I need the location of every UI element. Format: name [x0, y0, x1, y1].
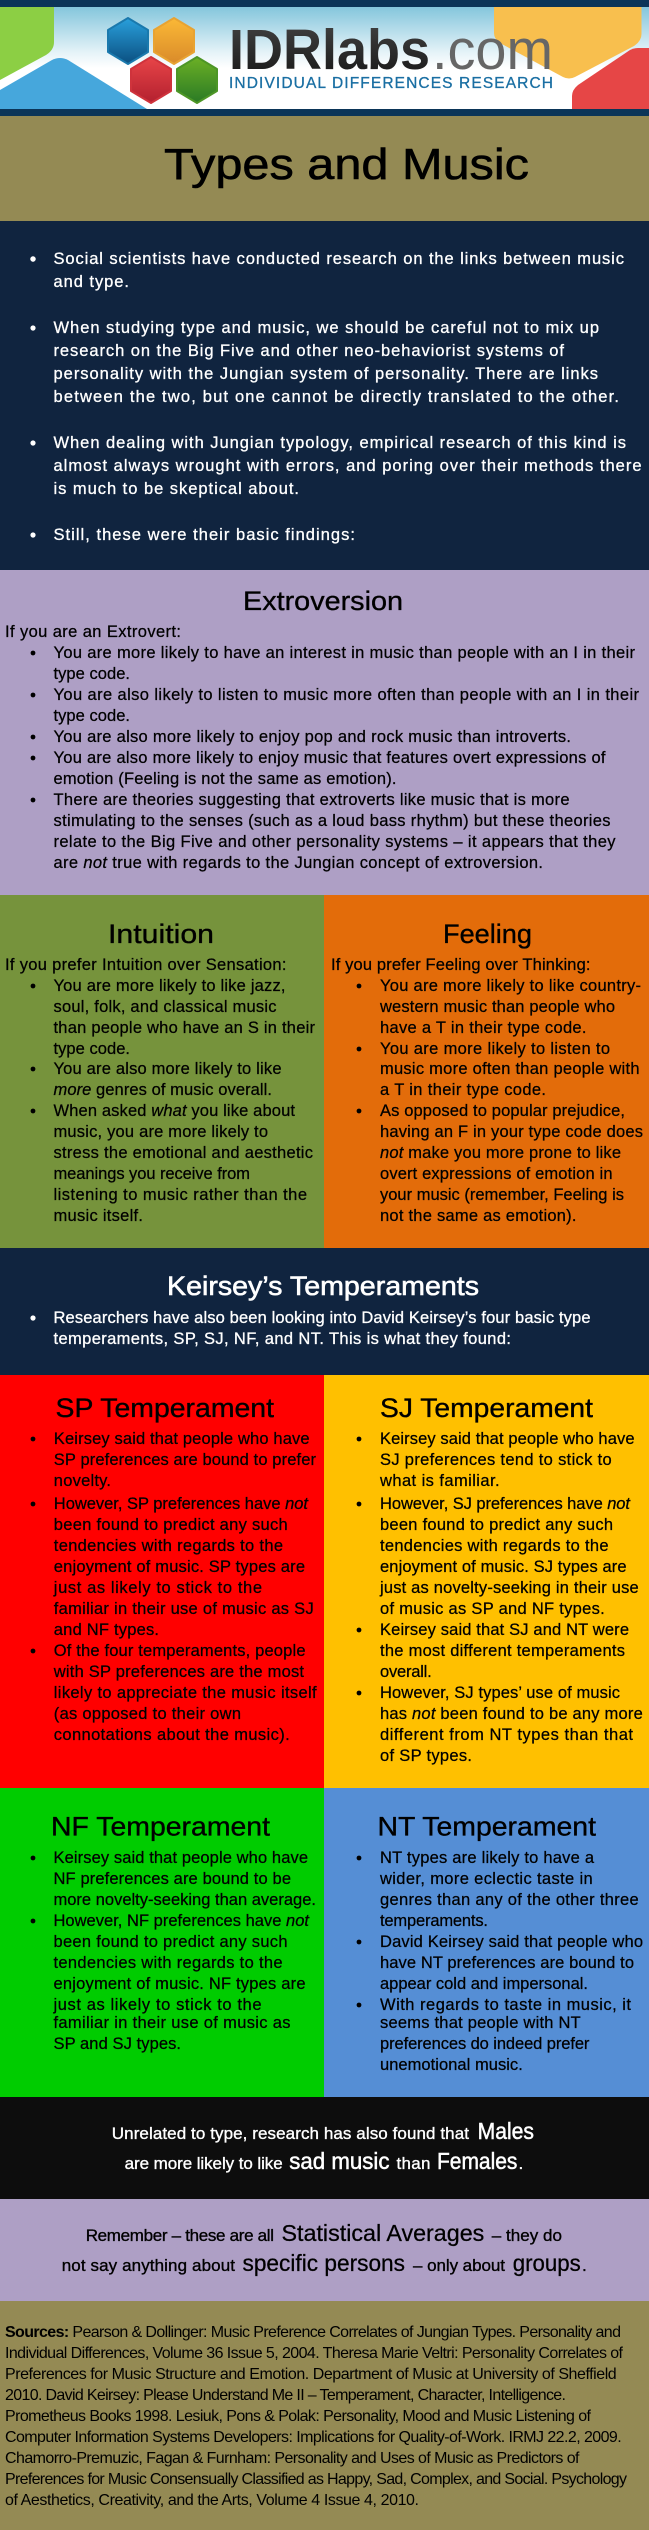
intuition list: stress the emotional and aesthetic [54, 1144, 313, 1162]
SP list: been found to predict any such [54, 1516, 288, 1534]
banner shape: red [572, 48, 649, 109]
sources text: Prometheus Books 1998. Lesiuk, Pons & Polak: Personality, Mood and Music Listening of [5, 2408, 592, 2425]
SJ list: different from NT types than that [380, 1726, 633, 1744]
heading: feeling: Feeling [443, 919, 532, 949]
bullet: empirical research: is much to be skeptical about. [54, 480, 299, 498]
NT list: NT types are likely to have a [380, 1849, 595, 1867]
hexagon: red [131, 57, 171, 103]
bullet: social scientists [30, 250, 624, 291]
NT list: appear cold and impersonal. [380, 1975, 588, 1993]
intuition list: When asked what you like about [54, 1102, 295, 1120]
extroversion list: type code. [54, 707, 130, 725]
intuition list: than people who have an S in their [54, 1019, 316, 1037]
intuition list: You are also more likely to like [54, 1060, 282, 1078]
bullet: type and music [30, 319, 619, 406]
bullet: empirical research [30, 434, 641, 498]
keirsey intro bullet [30, 1309, 590, 1348]
hexagon: blue [108, 18, 148, 64]
feeling list [357, 977, 643, 1225]
SP list: novelty. [54, 1472, 111, 1490]
intuition list: more genres of music overall. [54, 1081, 272, 1099]
NT list: genres than any of the other three [380, 1891, 639, 1909]
extroversion list: emotion (Feeling is not the same as emotion). [54, 770, 396, 788]
NT list: seems that people with NT [380, 2014, 581, 2032]
NF list: SP and SJ types. [54, 2035, 181, 2053]
NF list: NF preferences are bound to be [54, 1870, 291, 1888]
feeling list: having an F in your type code does [380, 1123, 643, 1141]
SJ list: what is familiar. [379, 1472, 500, 1490]
hexagon: green [177, 57, 217, 103]
reminder line 2: not say anything about [62, 2256, 235, 2275]
SJ list: has not been found to be any more [380, 1705, 643, 1723]
heading: keirsey's temperaments: Keirsey’s Temperaments [167, 1271, 479, 1301]
SJ list: However, SJ preferences have not [380, 1495, 631, 1513]
SP list: connotations about the music). [54, 1726, 290, 1744]
panel: NF temperament [0, 1788, 324, 2097]
feeling list: not the same as emotion). [380, 1207, 576, 1225]
SP list: with SP preferences are the most [53, 1663, 304, 1681]
keirsey intro bullet: temperaments, SP, SJ, NF, and NT. This is what they found: [54, 1330, 511, 1348]
intuition list: You are more likely to like jazz, [54, 977, 286, 995]
NT list: temperaments. [380, 1912, 488, 1930]
lead-in: If you are an Extrovert: [5, 623, 181, 641]
logo tagline: INDIVIDUAL DIFFERENCES RESEARCH [229, 75, 553, 92]
feeling list: music more often than people with [380, 1060, 640, 1078]
extroversion list: There are theories suggesting that extroverts like music that is more [54, 791, 570, 809]
logo hexagons [108, 18, 217, 103]
intuition list: meanings you receive from [54, 1165, 250, 1183]
NT list: preferences do indeed prefer [380, 2035, 590, 2053]
panel: SJ temperament [324, 1375, 649, 1788]
sources text: Computer Information Systems Developers: Implications for Quality-of-Work. IRMJ 22.2, 2009. [5, 2429, 622, 2446]
intuition list [31, 977, 315, 1225]
intuition list: type code. [54, 1040, 130, 1058]
SJ list: Keirsey said that people who have [380, 1430, 634, 1448]
NT list: David Keirsey said that people who [380, 1933, 643, 1951]
SP list: and NF types. [54, 1621, 159, 1639]
NF list: Keirsey said that people who have [54, 1849, 308, 1867]
SJ list: overall. [380, 1663, 432, 1681]
sources text: 2010. David Keirsey: Please Understand Me II – Temperament, Character, Intelligence. [5, 2387, 566, 2404]
intuition list: music, you are more likely to [54, 1123, 268, 1141]
feeling list: You are more likely to listen to [380, 1040, 610, 1058]
extroversion list: You are also likely to listen to music more often than people with an I in their [54, 686, 640, 704]
SJ list: the most different temperaments [380, 1642, 625, 1660]
bullet: social scientists: and type. [54, 273, 129, 291]
lead-in: If you prefer Feeling over Thinking: [331, 956, 590, 974]
SP list [31, 1430, 317, 1744]
NF list: more novelty-seeking than average. [54, 1891, 316, 1909]
sources text: Sources: Pearson & Dollinger: Music Preference Correlates of Jungian Types. Personality and [5, 2324, 621, 2341]
reminder line 1: – they do [492, 2226, 562, 2245]
panel: SP temperament [0, 1375, 324, 1788]
feeling list: not make you more prone to like [380, 1144, 621, 1162]
SP list: likely to appreciate the music itself [54, 1684, 317, 1702]
reminder line 1 [86, 2220, 562, 2246]
logo domain: .com [432, 18, 553, 82]
feeling list: overt expressions of emotion in [380, 1165, 612, 1183]
extroversion list: You are more likely to have an interest in music than people with an I in their [54, 644, 636, 662]
NT list: unemotional music. [380, 2056, 523, 2074]
sources text: Individual Differences, Volume 36 Issue 5, 2004. Theresa Marie Veltri: Personality Correlates of [5, 2345, 624, 2362]
feeling list: your music (remember, Feeling is [380, 1186, 624, 1204]
SJ list: However, SJ types’ use of music [380, 1684, 620, 1702]
panel: feeling [324, 895, 649, 1248]
lead-in: If you prefer Intuition over Sensation: [5, 956, 286, 974]
hexagon: orange [154, 18, 194, 64]
bullet: empirical research: When dealing with Jungian typology, empirical research of this kind is [54, 434, 626, 452]
SP list: enjoyment of music. SP types are [54, 1558, 305, 1576]
feeling list: You are more likely to like country- [380, 977, 641, 995]
NT list: wider, more eclectic taste in [379, 1870, 593, 1888]
bullet: type and music: personality with the Jungian system of personality. There are links [54, 365, 598, 383]
SP list: However, SP preferences have not [54, 1495, 309, 1513]
banner shape: green [0, 7, 54, 80]
heading: intuition: Intuition [108, 919, 214, 949]
NT list: have NT preferences are bound to [380, 1954, 634, 1972]
title panel [0, 116, 649, 221]
sources text: Chamorro-Premuzic, Fagan & Furnham: Personality and Uses of Music as Predictors of [5, 2450, 580, 2467]
reminder line 1: Statistical Averages [282, 2220, 484, 2246]
bullet: type and music: When studying type and music, we should be careful not to mix up [54, 319, 599, 337]
callout line 2: than [396, 2154, 430, 2173]
panel: intuition [0, 895, 324, 1248]
callout line 2: Females [437, 2148, 517, 2174]
NF list: However, NF preferences have not [54, 1912, 310, 1930]
SP list: tendencies with regards to the [54, 1537, 283, 1555]
SJ list: of SP types. [380, 1747, 472, 1765]
SP list: just as likely to stick to the [53, 1579, 262, 1597]
callout line 2: are more likely to like [125, 2154, 283, 2173]
sources text: Preferences for Music Consensually Classified as Happy, Sad, Complex, and Social. Psychology [5, 2471, 627, 2488]
NF list: just as likely to stick to the [52, 1996, 262, 2014]
header banner [0, 0, 649, 116]
panel: keirsey's temperaments intro [0, 1248, 649, 1375]
SP list: Of the four temperaments, people [54, 1642, 305, 1660]
heading: SJ: SJ Temperament [380, 1393, 594, 1423]
SJ list: been found to predict any such [380, 1516, 613, 1534]
extroversion list: You are also more likely to enjoy music that features overt expressions of [54, 749, 606, 767]
SP list: (as opposed to their own [54, 1705, 241, 1723]
panel: statistical averages reminder [0, 2199, 649, 2301]
SJ list: of music as SP and NF types. [380, 1600, 605, 1618]
bullet: type and music: research on the Big Five and other neo-behaviorist systems of [54, 342, 564, 360]
extroversion list: type code. [54, 665, 130, 683]
banner shape: yellow [494, 7, 642, 78]
intuition list: soul, folk, and classical music [54, 998, 276, 1016]
callout line 1 [112, 2118, 534, 2144]
sources text: Preferences for Music Structure and Emotion. Department of Music at University of Sheffield [5, 2366, 617, 2383]
bullet: type and music: between the two, but one cannot be directly translated to the other. [54, 388, 619, 406]
callout line 1: Unrelated to type, research has also found that [112, 2124, 469, 2143]
title: Types and Music [164, 140, 529, 189]
NT list: With regards to taste in music, it [380, 1996, 631, 2014]
bullet: empirical research: almost always wrought with errors, and poring over their methods there [54, 457, 642, 475]
heading: NT: NT Temperament [378, 1812, 597, 1842]
bullet: social scientists: Social scientists have conducted research on the links between music [54, 250, 624, 268]
callout line 2 [125, 2148, 523, 2174]
NF list: familiar in their use of music as [54, 2014, 290, 2032]
extroversion list: relate to the Big Five and other personality systems – it appears that they [54, 833, 616, 851]
SJ list: SJ preferences tend to stick to [380, 1451, 612, 1469]
reminder line 2 [62, 2250, 587, 2276]
panel: introduction [0, 221, 649, 570]
reminder line 2: . [582, 2256, 587, 2275]
panel: extroversion [0, 570, 649, 895]
extroversion list: are not true with regards to the Jungian concept of extroversion. [54, 854, 543, 872]
SJ list: just as novelty-seeking in their use [379, 1579, 639, 1597]
SJ list [357, 1430, 643, 1765]
SP list: familiar in their use of music as SJ [54, 1600, 314, 1618]
SP list: Keirsey said that people who have [54, 1430, 310, 1448]
heading: extroversion: Extroversion [243, 586, 403, 616]
reminder line 2: specific persons [242, 2250, 405, 2276]
panel: sex difference callout [0, 2097, 649, 2199]
feeling list: As opposed to popular prejudice, [380, 1102, 625, 1120]
intuition list: listening to music rather than the [54, 1186, 307, 1204]
NF list [31, 1849, 316, 2053]
sources text: of Aesthetics, Creativity, and the Arts, Volume 4 Issue 4, 2010. [5, 2492, 419, 2509]
intuition list: music itself. [54, 1207, 143, 1225]
heading: NF: NF Temperament [51, 1812, 271, 1842]
SP list: SP preferences are bound to prefer [54, 1451, 317, 1469]
callout line 2: sad music [289, 2148, 390, 2174]
extroversion list: stimulating to the senses (such as a loud bass rhythm) but these theories [54, 812, 610, 830]
SJ list: enjoyment of music. SJ types are [380, 1558, 627, 1576]
sources text [5, 2324, 627, 2509]
SJ list: tendencies with regards to the [380, 1537, 608, 1555]
panel: NT temperament [324, 1788, 649, 2097]
logo wordmark: IDRlabs [229, 18, 430, 82]
feeling list: have a T in their type code. [380, 1019, 586, 1037]
callout line 1: Males [478, 2118, 534, 2144]
panel: sources [0, 2301, 649, 2530]
banner shape: blue [0, 58, 147, 109]
NF list: been found to predict any such [54, 1933, 288, 1951]
NF list: enjoyment of music. NF types are [54, 1975, 306, 1993]
reminder line 2: groups [513, 2250, 581, 2276]
bullet: basic findings: Still, these were their basic findings: [54, 526, 355, 544]
extroversion list [31, 644, 640, 872]
NT list [357, 1849, 643, 2074]
feeling list: a T in their type code. [380, 1081, 546, 1099]
NF list: tendencies with regards to the [54, 1954, 282, 1972]
callout line 2: . [518, 2154, 523, 2173]
keirsey intro bullet: Researchers have also been looking into David Keirsey’s four basic type [54, 1309, 590, 1327]
extroversion list: You are also more likely to enjoy pop and rock music than introverts. [54, 728, 571, 746]
heading: SP: SP Temperament [56, 1393, 275, 1423]
reminder line 2: – only about [413, 2256, 505, 2275]
SJ list: Keirsey said that SJ and NT were [380, 1621, 629, 1639]
reminder line 1: Remember – these are all [86, 2226, 274, 2245]
feeling list: western music than people who [379, 998, 615, 1016]
